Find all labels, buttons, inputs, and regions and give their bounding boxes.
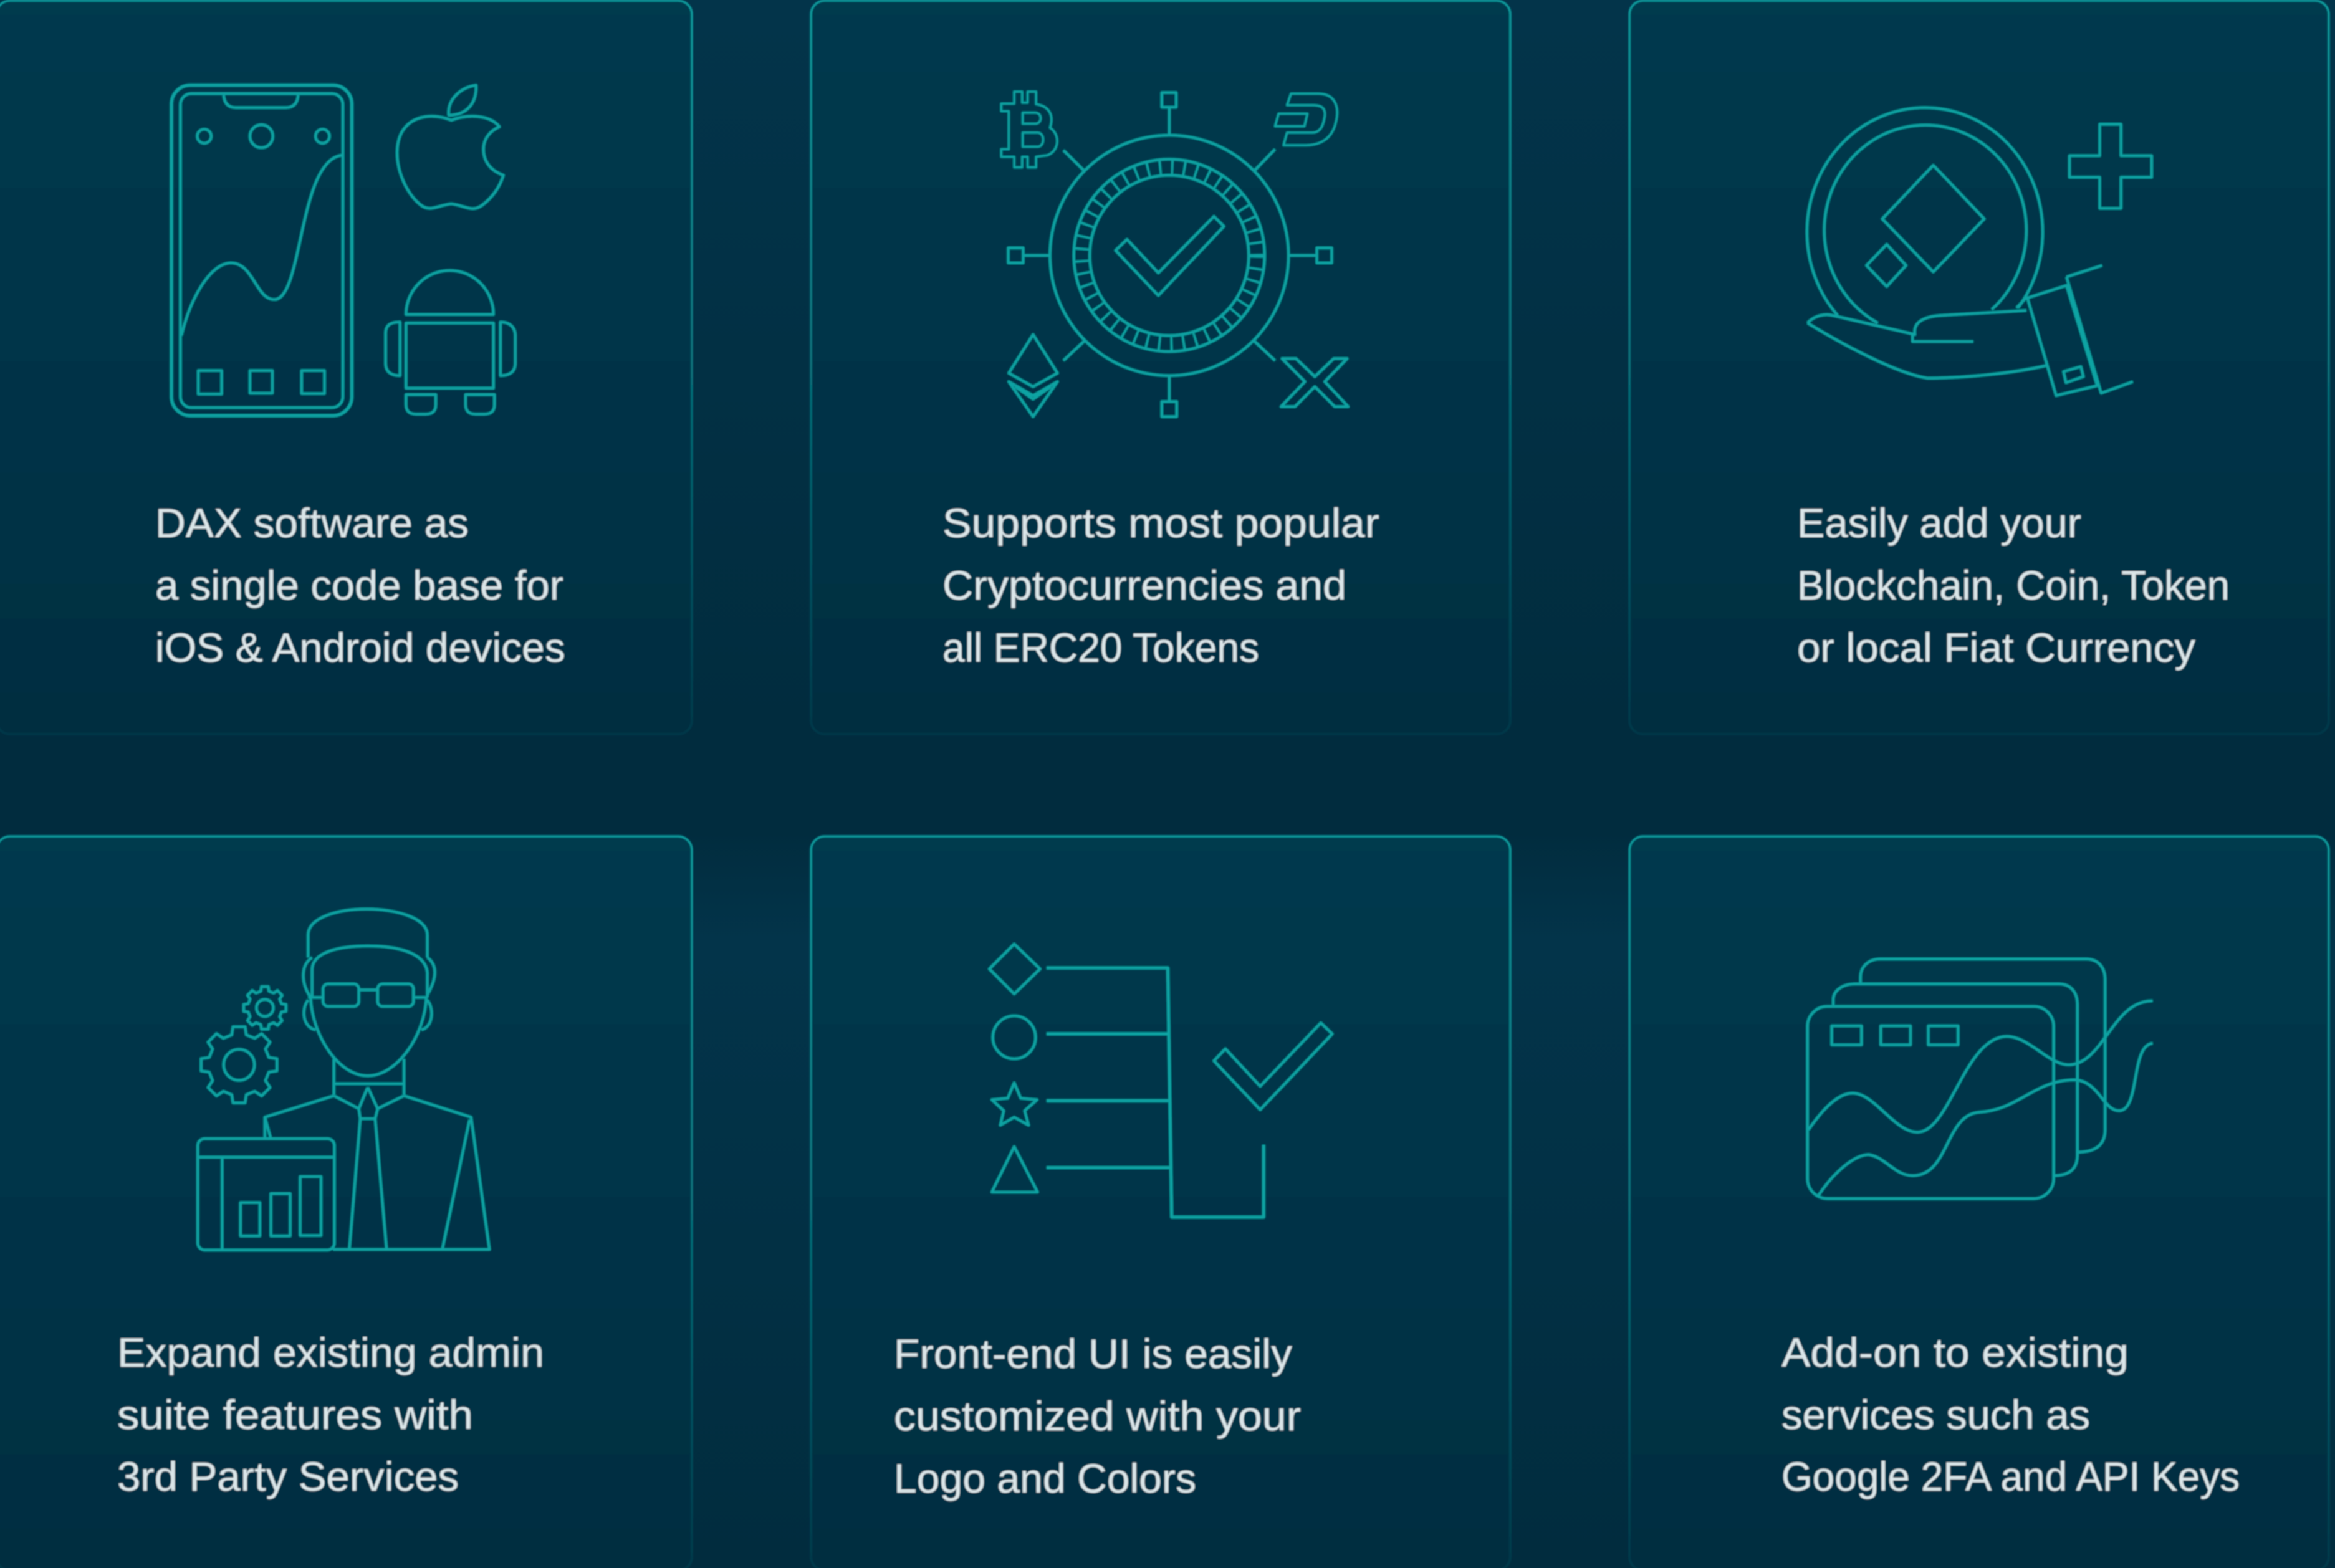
text: card 5 (894, 1331, 1301, 1501)
icon: ethereum (1009, 335, 1057, 417)
card 6 (1629, 836, 2329, 1568)
text: card 3 (1797, 500, 2230, 671)
text: card 4 (117, 1329, 544, 1499)
icon: small gear (244, 987, 286, 1029)
text: card 1: DAX software as (155, 500, 469, 546)
text: card 4: suite features with (117, 1392, 473, 1438)
icon: bitcoin (1001, 92, 1057, 167)
icon: dash (1275, 93, 1337, 145)
text: card 6 (1781, 1329, 2240, 1499)
text: card 1: iOS & Android devices (155, 624, 565, 671)
icon: connector spokes (1009, 93, 1331, 417)
text: card 4: Expand existing admin (117, 1329, 544, 1375)
icon: coin (1807, 108, 2043, 323)
text: card 6: services such as (1781, 1392, 2090, 1438)
text: card 2: all ERC20 Tokens (942, 624, 1259, 671)
icon: dashboard window (198, 1139, 335, 1250)
icon: plus (2069, 124, 2152, 208)
panel: front-end UI (811, 836, 1510, 1568)
icon: checkmark (1214, 1023, 1332, 1110)
text: card 1 (155, 500, 565, 671)
text: card 5: Front-end UI is easily (894, 1331, 1292, 1377)
icon: windows (1808, 959, 2105, 1198)
card 4 (0, 836, 692, 1568)
icon: android (386, 270, 515, 414)
text: card 1: a single code base for (155, 562, 563, 608)
text: card 3: Blockchain, Coin, Token (1797, 562, 2230, 608)
icon: shapes list with checkmark (989, 944, 1332, 1217)
icon: phone, apple and android (171, 85, 515, 416)
icon: ripple (1281, 358, 1348, 407)
icon: apple (397, 85, 504, 209)
icon: person (265, 909, 489, 1250)
card 1 (0, 1, 692, 734)
text: card 3: Easily add your (1797, 500, 2081, 546)
text: card 4: 3rd Party Services (117, 1453, 459, 1499)
card 5 (811, 836, 1510, 1568)
card 3 (1629, 1, 2329, 734)
icon: connector lines (1047, 968, 1263, 1217)
panel: admin suite (0, 836, 692, 1568)
text: card 2 (942, 500, 1379, 671)
icon: shapes (989, 944, 1040, 1192)
panel: add blockchain (1629, 1, 2329, 734)
text: card 5: Logo and Colors (894, 1455, 1196, 1501)
text: card 2: Supports most popular (942, 500, 1379, 546)
icon: large gear (201, 1026, 277, 1103)
panel: single code base (0, 1, 692, 734)
icon: hand and cuff (1808, 265, 2133, 396)
icon: hand holding coin with plus (1807, 108, 2152, 396)
text: card 6: Add-on to existing (1781, 1329, 2129, 1375)
card 2 (811, 1, 1510, 734)
panel: cryptocurrencies (811, 1, 1510, 734)
text: card 5: customized with your (894, 1393, 1301, 1439)
icon: chart curves (1808, 1001, 2153, 1195)
icon: central coin (1050, 135, 1288, 376)
icon: coin with check and crypto symbols (1001, 92, 1348, 417)
text: card 2: Cryptocurrencies and (942, 562, 1346, 608)
panel: add-on services (1629, 836, 2329, 1568)
text: card 3: or local Fiat Currency (1797, 624, 2195, 671)
icon: admin person with gears and dashboard (198, 909, 489, 1250)
icon: stacked chart windows (1808, 959, 2153, 1198)
icon: phone (171, 85, 352, 416)
text: card 6: Google 2FA and API Keys (1781, 1453, 2240, 1499)
